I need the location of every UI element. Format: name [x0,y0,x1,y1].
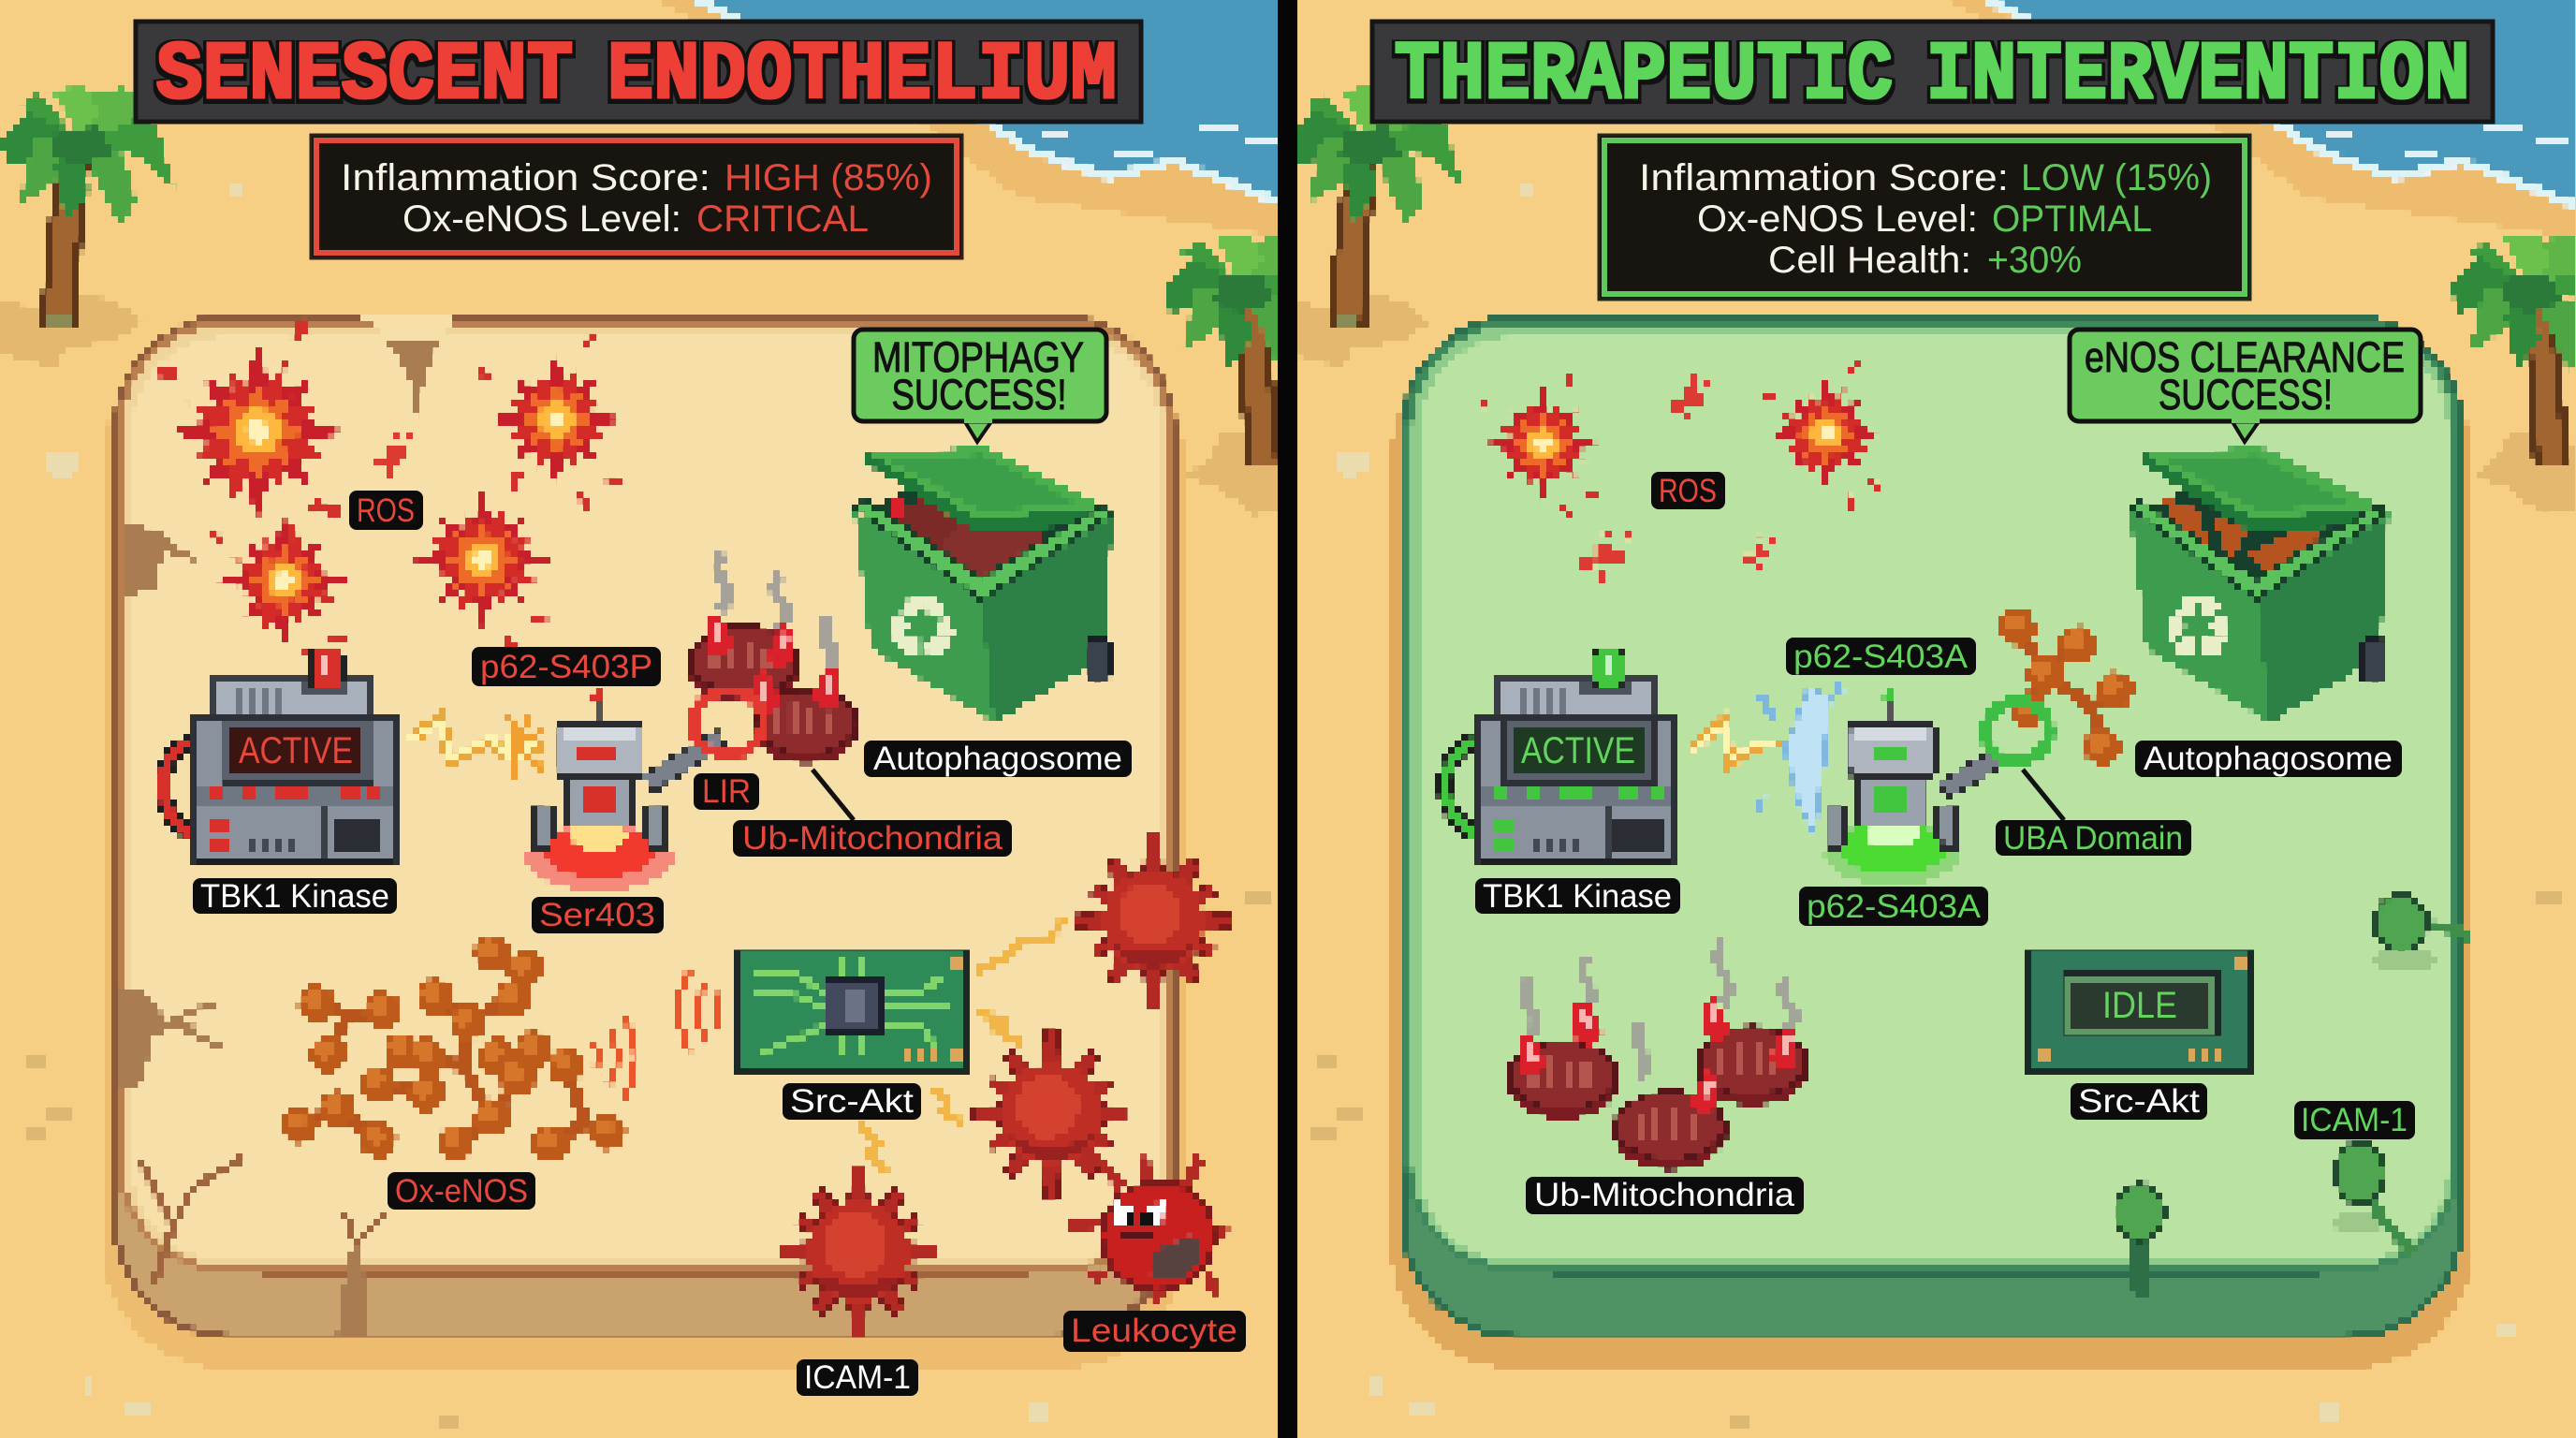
smoke from damaged mitochondria [717,552,835,676]
icon: recycling bin with mitochondria: ♻ [883,579,961,681]
icon: ice shield [1755,683,1844,835]
label: ROS: ROS [357,492,415,529]
status box: recovery readout: Cell Health: [1768,240,1971,281]
label: Autophagosome: Autophagosome [873,741,1122,777]
heading: senescent endothelium: SENESCENT ENDOTHELIUM [156,30,1117,123]
callout: mitophagy success: MITOPHAGY [872,333,1084,381]
label: Ub-Mitochondria red: Ub-Mitochondria [742,820,1003,857]
label: Leukocyte: Leukocyte [1071,1313,1237,1349]
callout: eNOS clearance success: SUCCESS! [2159,371,2333,418]
status box: recovery readout: OPTIMAL [1992,198,2152,240]
panel: senescent endothelium [103,22,1246,1396]
icon: ICAM-1 spiky receptors [781,834,1231,1339]
label: Ser403: Ser403 [539,897,655,933]
reduced ROS bursts [1477,359,1891,582]
icon: green UBA ring [1985,701,2049,761]
label: Ub-Mitochondria white: Ub-Mitochondria [1534,1177,1795,1213]
status box: inflammation readout: Inflammation Score: [341,157,710,198]
icon: recycling bin with mitochondria [854,448,1113,723]
callout: mitophagy success [854,330,1106,442]
icon: recycling bin with eNOS [2130,448,2389,723]
callout: mitophagy success: SUCCESS! [891,371,1067,418]
arrow: phosphorylation spark [410,716,548,779]
callout: eNOS clearance success: eNOS CLEARANCE [2085,333,2405,381]
icon: red LIR ring [693,691,764,755]
status box: recovery readout [1599,135,2250,300]
label: TBK1 Kinase right: TBK1 Kinase [1483,878,1672,915]
ROS bursts [157,316,634,668]
icon: orange eNOS molecule [1998,609,2134,766]
status box: recovery readout: Ox-eNOS Level: [1697,198,1978,240]
icon: p62 robot with LIR claw [534,690,725,848]
label: p62-S403A top: p62-S403A [1793,638,1969,675]
status box: recovery readout: Inflammation Score: [1639,157,2009,198]
label: ROS right: ROS [1659,473,1717,509]
status box: inflammation readout: CRITICAL [696,198,869,240]
callout: eNOS clearance success [2070,330,2421,442]
icon: Src-Akt circuit board [739,950,967,1072]
glow under p62 robot green [1824,818,1959,886]
left artwork layer [103,313,1231,1368]
arrows: small signal sparks [861,919,1065,1176]
icon: recycling bin with eNOS: ♻ [2159,579,2237,681]
label: p62-S403P: p62-S403P [480,649,652,685]
cell platform: healthy endothelium [1391,316,2472,1368]
label: UBA Domain: UBA Domain [2003,820,2183,857]
icon: p62 robot with UBA claw [1827,690,2006,848]
right panel background: sandy beach with ocean and palms [1288,0,2576,1438]
icon: TBK1 kinase machine [163,648,394,865]
label: Ox-eNOS: Ox-eNOS [395,1173,528,1210]
icon: angry leukocyte [1069,1147,1228,1303]
label: Autophagosome right: Autophagosome [2144,741,2393,777]
icon: TBK1 kinase machine active [1445,648,1676,865]
screen text: ACTIVE right: ACTIVE [1521,730,1635,771]
icon: resting ICAM-1 buds [2115,895,2470,1298]
status box: recovery readout: LOW (15%) [2021,157,2212,198]
heading: therapeutic intervention: THERAPEUTIC INTERVENTION [1395,30,2469,123]
label: ICAM-1 left: ICAM-1 [804,1359,911,1396]
panel: therapeutic intervention [1372,22,2493,1368]
label: TBK1 Kinase: TBK1 Kinase [200,878,389,915]
status box: inflammation readout: Ox-eNOS Level: [402,198,681,240]
label: Src-Akt right: Src-Akt [2078,1083,2200,1120]
status box: recovery readout: +30% [1987,240,2082,281]
glow under p62 robot [525,818,673,891]
label: p62-S403A bottom: p62-S403A [1807,888,1982,925]
label: ICAM-1 right: ICAM-1 [2301,1102,2408,1138]
icon: Src-Akt idle board [2027,950,2253,1072]
centre divider [1278,0,1297,1438]
icon: ubiquitinated mitochondria group [1505,996,1810,1170]
screen text: ACTIVE: ACTIVE [239,730,353,771]
leader line to UBA Domain [2023,770,2064,820]
smoke from mitochondria [1525,941,1794,1078]
status box: inflammation readout [311,135,962,258]
icon: ubiquitinated mitochondria [686,613,861,764]
screen text: IDLE: IDLE [2102,985,2177,1026]
label: Src-Akt left: Src-Akt [790,1083,914,1120]
cell platform: damaged endothelium [103,313,1184,1368]
signal waves [593,968,721,1101]
icon: Ox-eNOS molecule network [281,934,626,1162]
arrow: blocked spark [1692,721,1780,763]
right artwork layer [1391,316,2472,1368]
label: LIR: LIR [702,773,751,810]
leader line to Ub-Mitochondria [812,770,854,820]
left panel background: sandy beach with ocean and palms [0,0,1337,1438]
status box: inflammation readout: HIGH (85%) [724,157,932,198]
